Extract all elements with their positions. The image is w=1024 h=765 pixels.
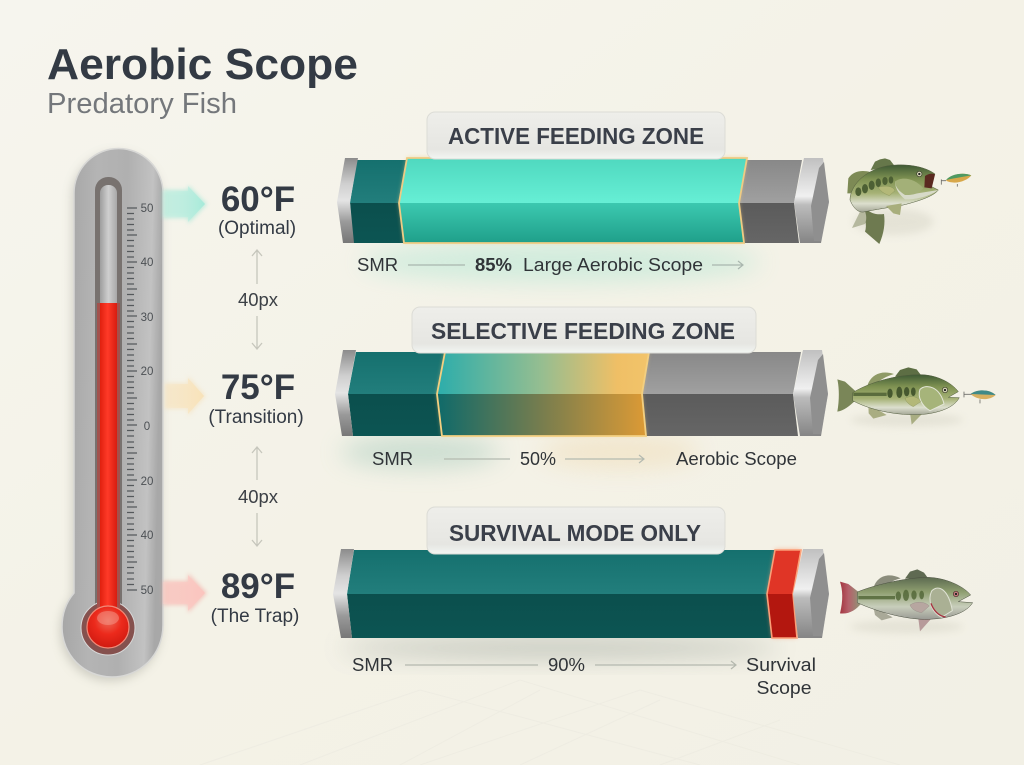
left cap (333, 549, 354, 638)
right cap (793, 549, 829, 638)
scale labels: 0 (144, 421, 150, 433)
scale labels: 50 (141, 585, 153, 597)
temperature: 60F (218, 180, 296, 239)
scale row: selective: Aerobic Scope (676, 448, 797, 469)
temperature: 75F (208, 368, 304, 428)
transition scope segment (437, 352, 649, 436)
survival scope segment (767, 550, 801, 638)
scale labels: 30 (141, 312, 153, 324)
right cap (793, 350, 828, 436)
zone label: survival: SURVIVAL MODE ONLY (449, 520, 701, 546)
scale labels (141, 203, 153, 597)
lure (941, 174, 971, 187)
scale row: active (357, 254, 743, 275)
zone label: active (427, 112, 725, 159)
temperature: 60F: (Optimal) (218, 218, 296, 239)
scale row: active: Large Aerobic Scope (523, 254, 703, 275)
mercury column (100, 303, 117, 613)
title: Aerobic Scope (47, 40, 358, 89)
scale row: selective (372, 448, 797, 469)
scale row: selective: 50% (520, 448, 556, 469)
scale row: survival: Scope (756, 677, 812, 698)
bar: survival mode (333, 549, 829, 638)
temperature: 89F (211, 567, 299, 627)
temperature: 60F: 60°F (221, 180, 295, 219)
scale row: survival: 90% (548, 654, 585, 675)
scale row: survival: SMR (352, 654, 393, 675)
glows (360, 242, 760, 282)
spacing note 1 (238, 250, 279, 349)
thermometer (60, 148, 163, 681)
scale labels: 20 (141, 366, 153, 378)
temperature: 75F: (Transition) (208, 407, 304, 428)
fish: stressed pale bass (840, 569, 973, 633)
scale row: selective: SMR (372, 448, 413, 469)
fish: horizontal bass with lure (837, 367, 996, 427)
SMR segment (348, 352, 445, 436)
scale labels: 20 (141, 476, 153, 488)
spacing note 2 (238, 447, 279, 546)
zone label: survival (427, 507, 725, 554)
remaining scope segment (642, 352, 801, 436)
arrow: 60F (163, 185, 207, 224)
scale labels: 40 (141, 530, 153, 542)
zone label: selective: SELECTIVE FEEDING ZONE (431, 318, 735, 344)
scale ticks (127, 208, 137, 590)
scale row: active: SMR (357, 254, 398, 275)
right cap (794, 158, 829, 243)
scale row: active: 85% (475, 254, 512, 275)
left cap (335, 350, 356, 436)
arrow: 89F (163, 573, 207, 613)
subtitle: Predatory Fish (47, 88, 237, 120)
zone label: selective (412, 307, 756, 353)
scale row: survival: Survival (746, 654, 816, 675)
lure (964, 390, 996, 403)
temperature: 75F: 75°F (221, 368, 295, 407)
arrow: 75F (165, 376, 206, 416)
spacing note 2: 40px (238, 486, 279, 507)
fish: leaping bass with lure (847, 158, 971, 244)
scale labels: 40 (141, 257, 153, 269)
bar: selective feeding zone (335, 350, 828, 436)
bar: active feeding zone (337, 157, 829, 243)
temperature: 89F: (The Trap) (211, 606, 299, 627)
temperature: 89F: 89°F (221, 567, 295, 606)
mercury bulb (87, 606, 129, 648)
SMR segment (347, 550, 775, 638)
scale labels: 50 (141, 203, 153, 215)
SMR segment (350, 160, 407, 243)
active scope segment (399, 158, 747, 243)
scale row: survival (352, 654, 816, 698)
left cap (337, 158, 358, 243)
zone label: active: ACTIVE FEEDING ZONE (448, 123, 704, 149)
remaining scope segment (739, 160, 802, 243)
spacing note 1: 40px (238, 289, 279, 310)
